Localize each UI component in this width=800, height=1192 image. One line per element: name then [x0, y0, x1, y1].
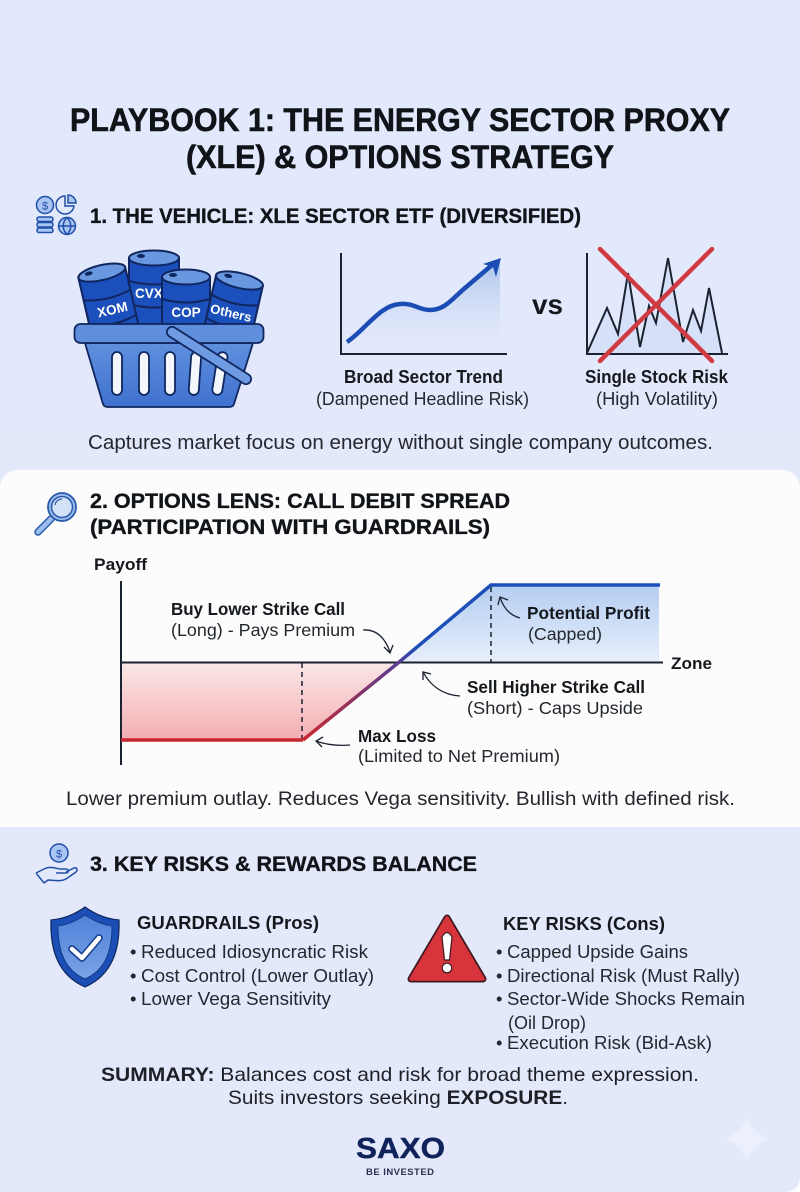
panel background [0, 470, 800, 827]
barrel: Others: Others [209, 301, 253, 325]
list: key risks: • [496, 965, 502, 986]
label: broad sector trend: (Dampened Headline Risk) [316, 389, 529, 409]
heading: section 2 [90, 489, 510, 539]
heading: section 1: 1. THE VEHICLE: XLE SECTOR ETF (DIVERSIFIED) [90, 204, 581, 228]
axis label: zone: Zone [671, 654, 712, 673]
list: key risks: Directional Risk (Must Rally) [507, 965, 740, 986]
icon: sparkle [725, 1117, 769, 1161]
chart: call debit spread payoff [94, 555, 712, 766]
barrel: XOM [77, 260, 140, 341]
icon: finance cluster: $ [42, 200, 48, 212]
icon: shield with check [51, 907, 119, 987]
chart: single stock risk [587, 249, 728, 361]
heading: section 2: (PARTICIPATION WITH GUARDRAILS) [90, 515, 490, 539]
list: guardrails [130, 913, 374, 1009]
title [70, 102, 730, 175]
loss zone [121, 663, 398, 740]
list: key risks: KEY RISKS (Cons) [503, 914, 665, 934]
basket [74, 324, 264, 407]
label: single stock risk: Single Stock Risk [585, 367, 729, 387]
list: key risks: Sector-Wide Shocks Remain [507, 988, 745, 1009]
logo: Saxo: SAXO [356, 1133, 445, 1165]
list: guardrails: Cost Control (Lower Outlay) [141, 965, 374, 986]
label: broad sector trend [316, 367, 529, 409]
callout: potential profit [498, 597, 650, 644]
list: key risks: • [496, 1032, 502, 1053]
callout: max loss: Max Loss [358, 726, 436, 746]
list: guardrails: GUARDRAILS (Pros) [137, 913, 319, 933]
summary: SUMMARY: Balances cost and risk for broad theme expression. [101, 1064, 699, 1086]
barrel: Others [202, 268, 265, 346]
list: guardrails: • [130, 965, 136, 986]
barrel: CVX [129, 250, 179, 326]
caption: section 2: Lower premium outlay. Reduces Vega sensitivity. Bullish with defined risk. [66, 788, 735, 810]
heading: section 3: 3. KEY RISKS & REWARDS BALANCE [90, 852, 477, 876]
callout: buy lower strike call: Buy Lower Strike Call [171, 599, 345, 619]
list: guardrails: • [130, 988, 136, 1009]
callout: buy lower strike call [171, 599, 393, 653]
list: key risks: Execution Risk (Bid-Ask) [507, 1032, 712, 1053]
icon: basket of oil barrels [74, 250, 265, 407]
icon: warning triangle [411, 918, 483, 979]
icon: hand holding coin [36, 844, 77, 883]
label: broad sector trend: Broad Sector Trend [344, 367, 503, 387]
callout: sell higher strike call [423, 672, 645, 718]
callout: sell higher strike call: Sell Higher Strike Call [467, 677, 645, 697]
logo: Saxo [356, 1133, 445, 1178]
list: key risks: Capped Upside Gains [507, 941, 688, 962]
title: PLAYBOOK 1: THE ENERGY SECTOR PROXY [70, 102, 730, 138]
logo: Saxo: BE INVESTED [366, 1167, 434, 1178]
summary [101, 1064, 699, 1109]
panel: options lens [0, 470, 800, 827]
callout: sell higher strike call: (Short) - Caps Upside [467, 698, 643, 718]
profit zone [398, 585, 659, 663]
callout: potential profit: (Capped) [528, 624, 602, 644]
list: key risks: • [496, 988, 502, 1009]
callout: max loss [316, 726, 560, 766]
summary: Suits investors seeking EXPOSURE . [228, 1087, 568, 1109]
callout: max loss: (Limited to Net Premium) [358, 746, 560, 766]
label: single stock risk: (High Volatility) [596, 389, 718, 409]
barrel: CVX: CVX [135, 286, 163, 301]
axes [121, 581, 663, 765]
heading: section 2: 2. OPTIONS LENS: CALL DEBIT SPREAD [90, 489, 510, 513]
list: key risks: (Oil Drop) [508, 1012, 586, 1033]
list: key risks: • [496, 941, 502, 962]
barrel: COP: COP [171, 305, 201, 320]
caption: section 1: Captures market focus on energy without single company outcomes. [88, 431, 713, 454]
list: guardrails: Reduced Idiosyncratic Risk [141, 941, 369, 962]
versus label: vs [532, 289, 563, 320]
list: key risks [496, 914, 745, 1053]
title: (XLE) & OPTIONS STRATEGY [186, 139, 614, 175]
list: guardrails: Lower Vega Sensitivity [141, 988, 332, 1009]
barrel: XOM: XOM [96, 299, 129, 320]
icon: magnifying glass [38, 493, 76, 532]
strike markers [302, 587, 491, 739]
label: single stock risk [585, 367, 729, 409]
icon: finance cluster [36, 195, 76, 234]
panel: risks and rewards [36, 844, 745, 1109]
payoff line [121, 585, 660, 740]
panel: the vehicle [36, 195, 729, 454]
icon: hand holding coin: $ [56, 848, 62, 860]
callout: buy lower strike call: (Long) - Pays Premium [171, 620, 355, 640]
chart: broad sector trend [341, 253, 507, 354]
callout: potential profit: Potential Profit [527, 603, 650, 623]
list: guardrails: • [130, 941, 136, 962]
axis label: payoff: Payoff [94, 555, 147, 574]
barrel: COP [162, 270, 210, 326]
